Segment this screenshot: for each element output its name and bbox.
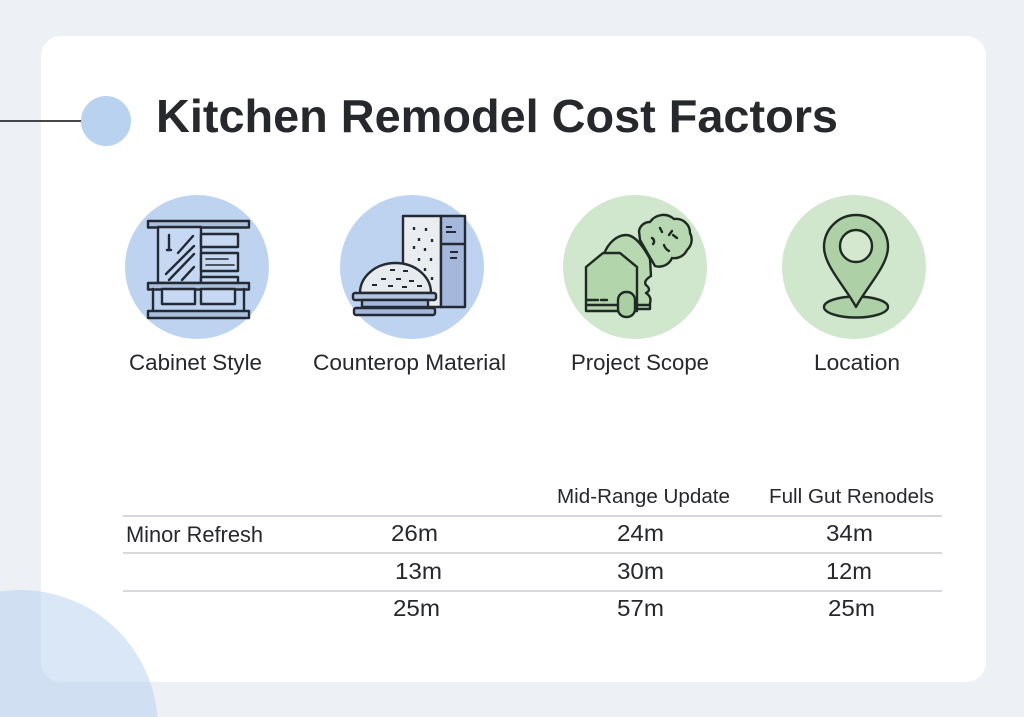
- icon: location: [782, 195, 926, 339]
- label: location: Location: [814, 350, 900, 375]
- table row 2: 30m: [617, 558, 664, 584]
- table row 2: 12m: [826, 558, 872, 584]
- icon: counterop material: [340, 195, 484, 339]
- table: [123, 485, 942, 621]
- table row 1: 26m: [391, 520, 438, 546]
- table row 1: 24m: [617, 520, 664, 546]
- table row 2: [395, 558, 872, 584]
- table row 3: 25m: [828, 595, 875, 621]
- table row 3: [393, 595, 875, 621]
- icon: project scope: [563, 195, 707, 339]
- table row 1: [126, 520, 873, 547]
- label: cabinet style: Cabinet Style: [129, 350, 262, 375]
- table row 2: 13m: [395, 558, 442, 584]
- decorative corner circle: [0, 590, 158, 717]
- table row 1: 34m: [826, 520, 873, 546]
- icon: cabinet style: [125, 195, 269, 339]
- table header: mid-range update: Mid-Range Update: [557, 485, 730, 508]
- table row 1: Minor Refresh: [126, 522, 263, 547]
- table row 3: 57m: [617, 595, 664, 621]
- label: project scope: Project Scope: [571, 350, 709, 375]
- title: Kitchen Remodel Cost Factors: [156, 90, 838, 142]
- table row 3: 25m: [393, 595, 440, 621]
- title accent line and dot: [0, 96, 131, 146]
- label: counterop material: Counterop Material: [313, 350, 506, 375]
- table header: full gut renodels: Full Gut Renodels: [769, 485, 934, 508]
